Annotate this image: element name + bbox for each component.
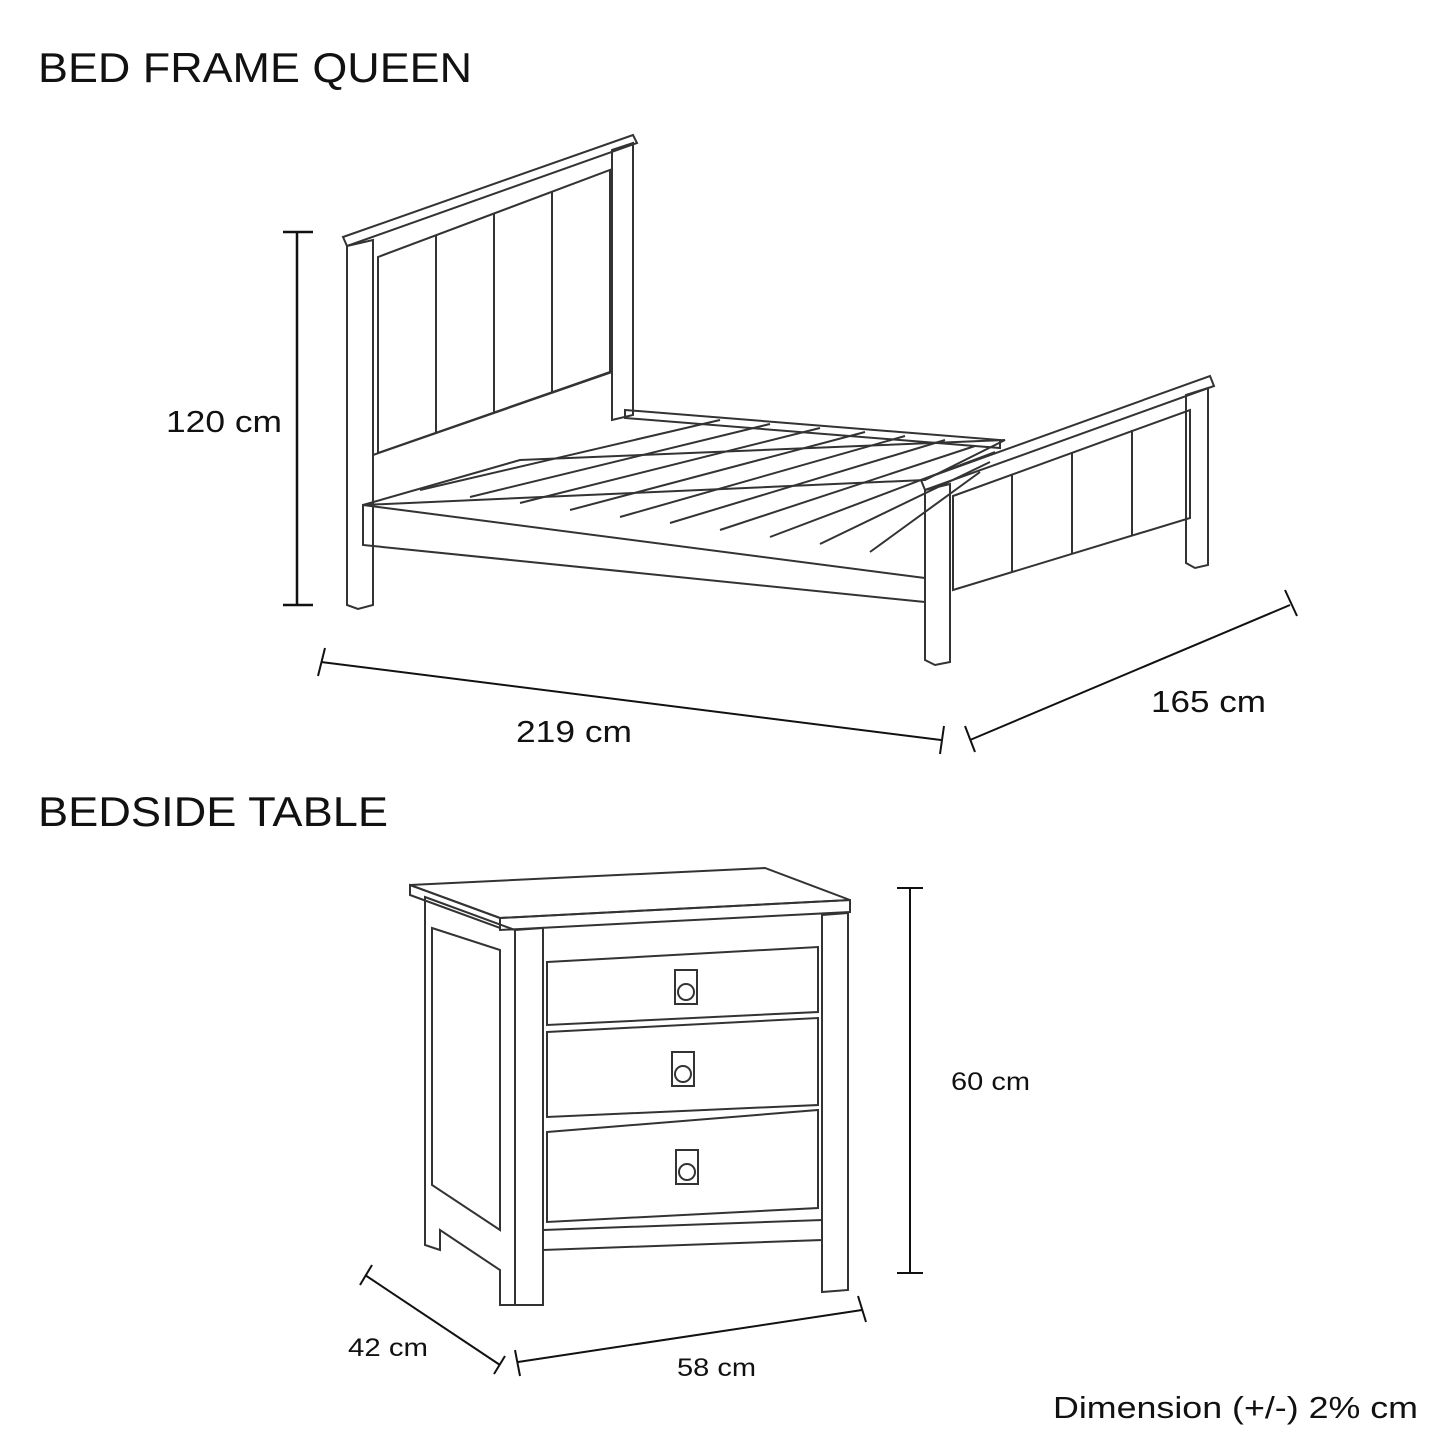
handles bbox=[672, 970, 698, 1184]
label: 219 cm: 219 cm bbox=[516, 714, 632, 749]
side panel bbox=[425, 897, 515, 1305]
footboard bbox=[921, 376, 1214, 665]
label: 58 cm: 58 cm bbox=[677, 1354, 756, 1382]
front frame bbox=[515, 913, 848, 1305]
dimension: bed height 120 cm bbox=[283, 232, 313, 605]
dimension: table height 60 cm bbox=[897, 888, 923, 1273]
headboard bbox=[343, 135, 637, 609]
label: 60 cm: 60 cm bbox=[951, 1068, 1030, 1096]
bedside table drawing bbox=[410, 868, 850, 1305]
dimension: table depth 42 cm bbox=[360, 1265, 505, 1374]
side rail and slats bbox=[363, 410, 1005, 602]
dimension: table width 58 cm bbox=[515, 1296, 866, 1376]
label: 42 cm: 42 cm bbox=[348, 1334, 428, 1362]
bed frame drawing bbox=[343, 135, 1214, 665]
drawers bbox=[547, 947, 818, 1222]
title: bedside table: BEDSIDE TABLE bbox=[38, 788, 388, 835]
footnote: dimension tolerance: Dimension (+/-) 2% cm bbox=[1053, 1390, 1418, 1425]
dimension: bed width 165 cm bbox=[965, 590, 1297, 752]
label: 165 cm: 165 cm bbox=[1151, 684, 1266, 719]
dimension: bed length 219 cm bbox=[318, 648, 944, 754]
label: 120 cm: 120 cm bbox=[166, 404, 282, 439]
title: bed frame queen: BED FRAME QUEEN bbox=[38, 44, 472, 91]
